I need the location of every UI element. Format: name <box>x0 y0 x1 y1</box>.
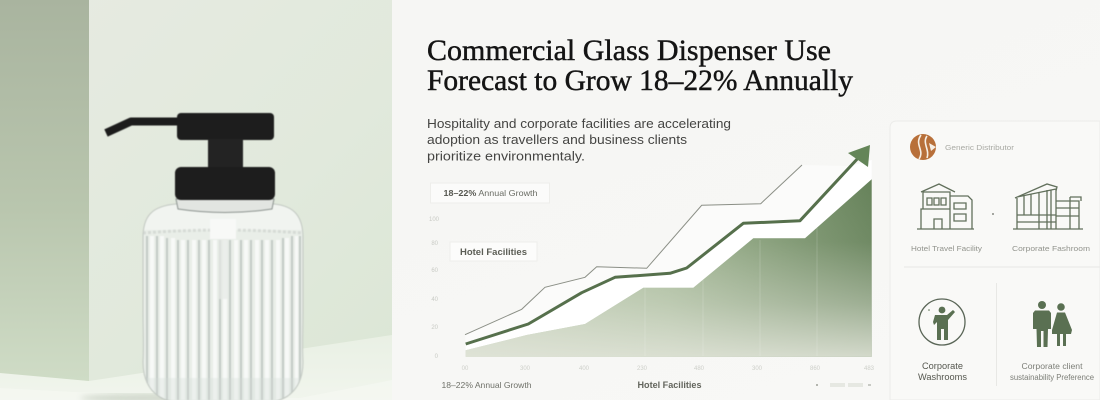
y axis labels: 20 <box>431 325 439 331</box>
x axis labels: 860 <box>810 366 821 372</box>
glass outline <box>143 204 303 400</box>
footer pagination marks <box>816 383 871 387</box>
icon: person in circle <box>919 299 965 345</box>
panel: facility types <box>890 121 1100 400</box>
y axis labels <box>429 217 440 360</box>
icon: two people <box>1033 301 1072 347</box>
y axis labels: 80 <box>431 241 439 247</box>
caption: corporate washrooms: Corporate <box>922 361 963 371</box>
subtitle text block: adoption as travellers and business clients <box>427 132 688 147</box>
y axis labels: 60 <box>431 268 439 274</box>
floor light strip <box>0 380 392 400</box>
x axis labels: 480 <box>694 366 705 372</box>
footer caption centre: Hotel Facilities <box>638 380 702 390</box>
thin trend line <box>465 165 802 335</box>
dispenser <box>106 113 306 400</box>
product photo: glass soap dispenser <box>0 0 392 400</box>
glass body <box>140 200 306 400</box>
caption: corporate client preference: sustainability Preference <box>1010 373 1095 382</box>
x axis labels: 483 <box>864 366 875 372</box>
caption: corporate washrooms <box>918 361 968 382</box>
brand logo <box>910 134 936 160</box>
subtitle text block: Hospitality and corporate facilities are accelerating <box>427 116 731 131</box>
shadow under dispenser <box>80 394 220 400</box>
hotel caption: Hotel Travel Facility <box>911 244 982 253</box>
icon: corporate building <box>1013 184 1083 229</box>
green plinth block <box>0 0 89 381</box>
y axis labels: 40 <box>431 297 439 303</box>
caption: corporate client preference: Corporate client <box>1022 362 1083 371</box>
y axis labels: 0 <box>435 354 439 360</box>
label: hotel facilities box: Hotel Facilities <box>460 247 527 258</box>
caption: corporate client preference <box>1010 362 1095 382</box>
growth chart <box>429 145 875 390</box>
icon: hotel building <box>917 184 974 229</box>
caption: corporate washrooms: Washrooms <box>918 372 968 382</box>
x axis labels: 300 <box>520 366 531 372</box>
pump head <box>177 113 274 140</box>
photo wall backdrop <box>0 0 392 400</box>
corporate caption: Corporate Fashroom <box>1012 244 1090 253</box>
photo floor <box>0 335 392 400</box>
arrow head <box>848 145 870 167</box>
x axis labels: 230 <box>637 366 648 372</box>
x axis labels: 00 <box>462 366 469 372</box>
footer caption left: 18–22% Annual Growth <box>442 380 532 390</box>
pump stem <box>208 139 243 169</box>
area fade <box>466 179 872 357</box>
x axis labels: 300 <box>752 366 763 372</box>
title: Forecast to Grow 18–22% Annually <box>427 64 853 97</box>
band between thin and thick lines <box>465 165 850 344</box>
glass neck <box>176 199 274 212</box>
title: Commercial Glass Dispenser Use <box>427 34 831 67</box>
label: hotel facilities box <box>450 242 537 261</box>
label: annual growth box: 18–22% Annual Growth <box>444 188 538 198</box>
spout <box>106 122 178 133</box>
thick trend line <box>466 156 860 344</box>
x axis labels: 400 <box>579 366 590 372</box>
separator dot <box>992 213 994 215</box>
inner pump tube <box>210 219 236 299</box>
white band below thick line <box>466 160 872 350</box>
green area series <box>466 179 872 357</box>
label: annual growth box <box>430 183 550 203</box>
y axis labels: 100 <box>429 217 440 223</box>
panel card <box>890 121 1100 400</box>
collar <box>175 167 275 200</box>
brand caption: Generic Distributor <box>945 143 1015 152</box>
x axis labels <box>462 366 875 372</box>
subtitle text block <box>427 116 731 164</box>
title <box>427 34 853 97</box>
subtitle text block: prioritize environmentaly. <box>427 148 585 164</box>
